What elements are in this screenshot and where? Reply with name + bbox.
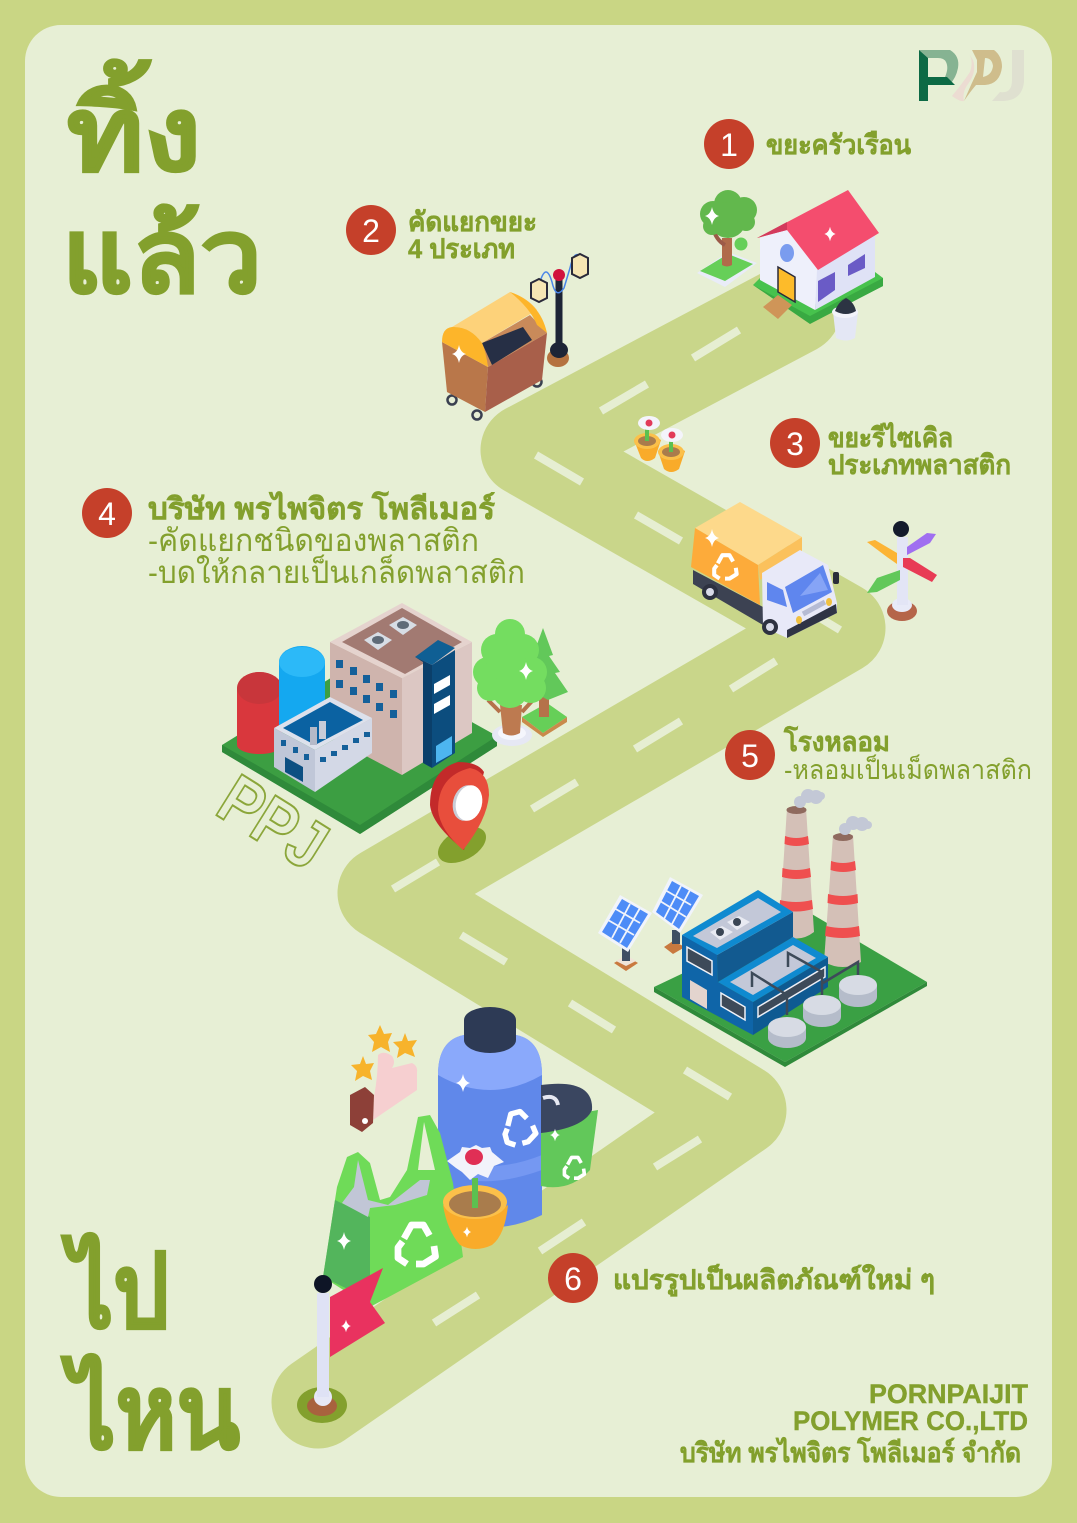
icon: recycled bottle	[438, 1007, 542, 1228]
step 1 badge	[704, 119, 754, 169]
icon: smelting plant	[654, 789, 927, 1067]
step 3 label: ประเภทพลาสติก	[828, 450, 1011, 480]
step 4 badge	[82, 488, 132, 538]
step 4 badge: 4	[98, 496, 116, 532]
step 4 label: บริษัท พรไพจิตร โพลีเมอร์	[148, 490, 495, 526]
step 6 badge	[548, 1253, 598, 1303]
icon: waste container and street lamp	[442, 254, 588, 420]
icon: signpost	[867, 521, 937, 621]
title: ทิ้ง แล้ว: ทิ้ง	[67, 59, 201, 192]
step 2 label	[408, 207, 537, 264]
step 5 label: -หลอมเป็นเม็ดพลาสติก	[784, 752, 1032, 785]
step 1 label: ขยะครัวเรือน	[766, 130, 911, 160]
step 3 label: ขยะรีไซเคิล	[828, 422, 953, 453]
step 2 badge	[346, 205, 396, 255]
step 3 badge: 3	[786, 426, 804, 462]
step 5 label	[783, 725, 1032, 785]
icon: PPJ factory	[222, 603, 497, 834]
icon: flower pots	[634, 416, 685, 472]
title: ทิ้ง แล้ว	[62, 59, 262, 314]
company footer: POLYMER CO.,LTD	[793, 1406, 1028, 1436]
icon: solar panels	[598, 877, 703, 971]
icon: reusable shopping bag	[323, 1115, 463, 1307]
title: ทิ้ง แล้ว: แล้ว	[62, 199, 262, 314]
icon: thumbs up with stars	[350, 1025, 417, 1132]
step 2 label: คัดแยกขยะ	[408, 207, 537, 237]
step 6 badge: 6	[564, 1261, 582, 1297]
step 5 label: โรงหลอม	[783, 725, 890, 757]
step 3 label	[828, 422, 1011, 480]
step 5 badge	[725, 730, 775, 780]
step 4 label	[148, 490, 525, 590]
icon: location pin	[430, 762, 492, 870]
step 5 badge: 5	[741, 738, 759, 774]
step 4 label: -คัดแยกชนิดของพลาสติก	[148, 523, 479, 558]
icon: house with tree	[697, 190, 883, 340]
step 2 badge: 2	[362, 213, 380, 249]
icon: recycled cup	[541, 1084, 598, 1187]
icon: recycling truck	[691, 502, 839, 638]
PPJ outlined label: PPJ	[205, 760, 341, 885]
step 3 badge	[770, 418, 820, 468]
company footer: PORNPAIJIT	[869, 1379, 1028, 1409]
icon: potted flower	[443, 1145, 508, 1249]
title: ไป ไหน	[60, 1233, 240, 1470]
icon: finish flag	[297, 1268, 385, 1423]
step 4 label: -บดให้กลายเป็นเกล็ดพลาสติก	[148, 554, 525, 590]
title: ไป ไหน: ไหน	[60, 1354, 240, 1470]
step 2 label: 4 ประเภท	[408, 234, 515, 264]
company footer	[680, 1379, 1028, 1468]
step 6 label: แปรรูปเป็นผลิตภัณฑ์ใหม่ ๆ	[613, 1262, 935, 1297]
winding road	[318, 308, 840, 1402]
logo: PPJ	[919, 50, 1024, 101]
title: ไป ไหน: ไป	[60, 1233, 169, 1349]
step 1 badge: 1	[720, 127, 738, 163]
icon: trees beside factory	[473, 619, 568, 746]
company footer: บริษัท พรไพจิตร โพลีเมอร์ จำกัด	[680, 1436, 1021, 1468]
